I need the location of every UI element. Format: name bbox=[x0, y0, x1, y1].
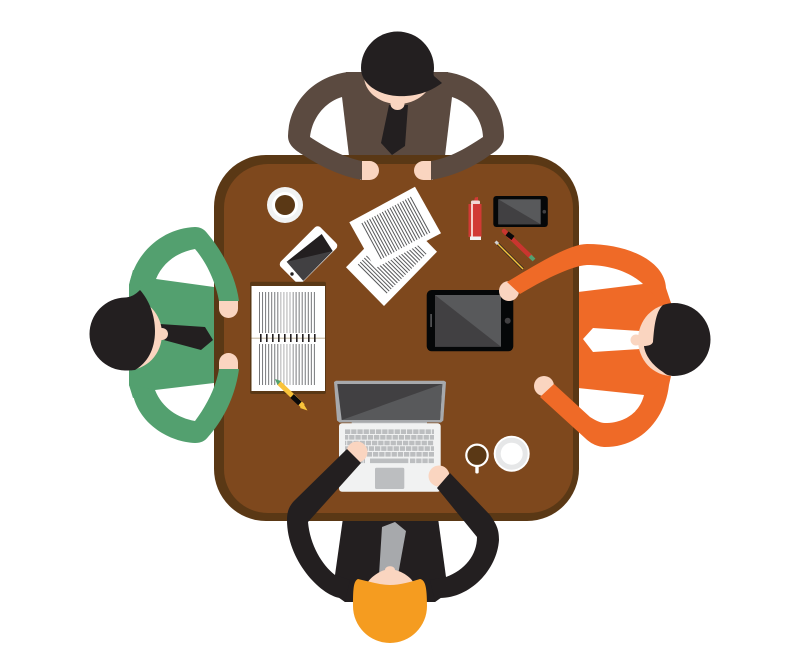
icon: tablet bbox=[427, 290, 513, 351]
face bbox=[364, 76, 432, 104]
notebook: upper page lines bbox=[259, 292, 316, 333]
icon: pencil on notebook bbox=[275, 379, 308, 410]
hair bbox=[361, 32, 442, 96]
neck and face bbox=[364, 566, 417, 590]
icon: yellow pencil bbox=[496, 242, 523, 269]
laptop: screen bbox=[334, 381, 446, 422]
person: bottom, black jacket with orange hair bbox=[287, 442, 499, 643]
hands bbox=[219, 299, 238, 371]
person: left, green jacket bbox=[89, 227, 239, 443]
icon: red marker bbox=[468, 197, 482, 240]
arms bbox=[507, 244, 671, 447]
laptop: base bbox=[339, 423, 441, 492]
table bbox=[214, 155, 579, 521]
notebook: lower page lines bbox=[259, 344, 316, 385]
arms bbox=[288, 72, 504, 180]
notebook bbox=[250, 282, 326, 394]
hair bbox=[89, 290, 155, 370]
neck bbox=[390, 98, 404, 110]
icon: small tablet bbox=[493, 196, 548, 227]
icon: red pen bbox=[504, 231, 534, 260]
hair bbox=[353, 579, 427, 643]
icon: saucer bbox=[494, 436, 530, 472]
icon: smartphone bbox=[278, 225, 339, 285]
arms bbox=[129, 227, 239, 443]
person: right, orange jacket bbox=[499, 244, 710, 447]
torso: bottom person bbox=[335, 518, 446, 602]
laptop bbox=[334, 381, 446, 492]
person: top, brown jacket bbox=[288, 32, 504, 180]
nose knob bbox=[630, 334, 642, 346]
notebook: spiral binding bbox=[260, 334, 316, 342]
hands bbox=[360, 161, 433, 180]
torso: right person bbox=[578, 284, 671, 398]
nose knob bbox=[156, 328, 168, 340]
laptop: keyboard bbox=[345, 432, 434, 461]
hands bbox=[346, 442, 368, 462]
icon: coffee cup on saucer bbox=[267, 187, 303, 223]
face bbox=[638, 304, 706, 376]
icon: coffee mug bbox=[466, 445, 488, 474]
face bbox=[94, 298, 162, 370]
torso: left person bbox=[129, 270, 214, 398]
hands bbox=[499, 281, 519, 301]
document: upper paper bbox=[349, 187, 441, 268]
laptop: trackpad bbox=[375, 468, 404, 489]
document: lower paper bbox=[346, 213, 437, 306]
torso: top person bbox=[342, 72, 452, 156]
arms bbox=[287, 449, 499, 602]
hair bbox=[644, 303, 710, 376]
